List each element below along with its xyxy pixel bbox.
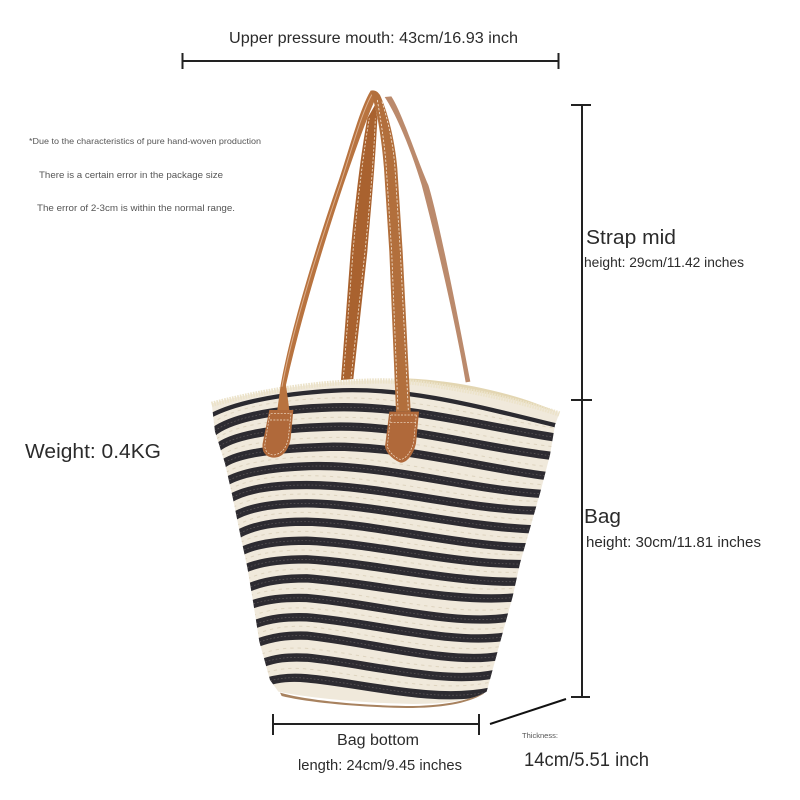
label: strap mid height [584, 227, 744, 270]
label: strap mid height: Strap mid [586, 227, 676, 249]
label: bag height: height: 30cm/11.81 inches [586, 534, 761, 551]
dimension line: thickness [490, 699, 566, 724]
illustration: woven striped bag [210, 378, 559, 708]
label: thickness [522, 733, 649, 771]
bag bottom shadow [280, 690, 487, 708]
illustration: front straps and leather tabs [262, 90, 419, 463]
note: hand-woven size tolerance [29, 136, 261, 214]
label: bag bottom length: length: 24cm/9.45 inches [298, 758, 462, 774]
leather tab: left [262, 410, 293, 458]
strap: far back thin [385, 96, 470, 382]
note: hand-woven size tolerance: *Due to the characteristics of pure hand-woven production [29, 136, 261, 146]
label: thickness: Thickness: [522, 733, 558, 740]
strap: front right [371, 90, 411, 412]
title: upper pressure mouth: Upper pressure mouth: 43cm/16.93 inch [229, 30, 518, 47]
label: strap mid height: height: 29cm/11.42 inches [584, 254, 744, 270]
label: bag bottom length: Bag bottom [337, 732, 419, 749]
dimension line: mouth width [182, 53, 559, 69]
note: hand-woven size tolerance: The error of 2-3cm is within the normal range. [37, 203, 235, 214]
strap: back inner [341, 105, 377, 380]
label: weight: Weight: 0.4KG [25, 441, 161, 463]
dimension line: strap and bag height [571, 105, 592, 697]
label: bag height [584, 506, 761, 551]
strap: front left [277, 91, 377, 410]
label: thickness: 14cm/5.51 inch [524, 750, 649, 771]
woven stripes [210, 390, 558, 695]
note: hand-woven size tolerance: There is a certain error in the package size [39, 170, 223, 181]
label: bag bottom length [298, 732, 462, 774]
label: bag height: Bag [584, 506, 621, 528]
leather tab: right [385, 412, 419, 463]
fringe rim [212, 381, 559, 414]
bag back rim [407, 378, 559, 425]
bag body [212, 380, 559, 704]
dimension line: bag bottom length [273, 714, 479, 735]
illustration: back straps [341, 96, 470, 382]
